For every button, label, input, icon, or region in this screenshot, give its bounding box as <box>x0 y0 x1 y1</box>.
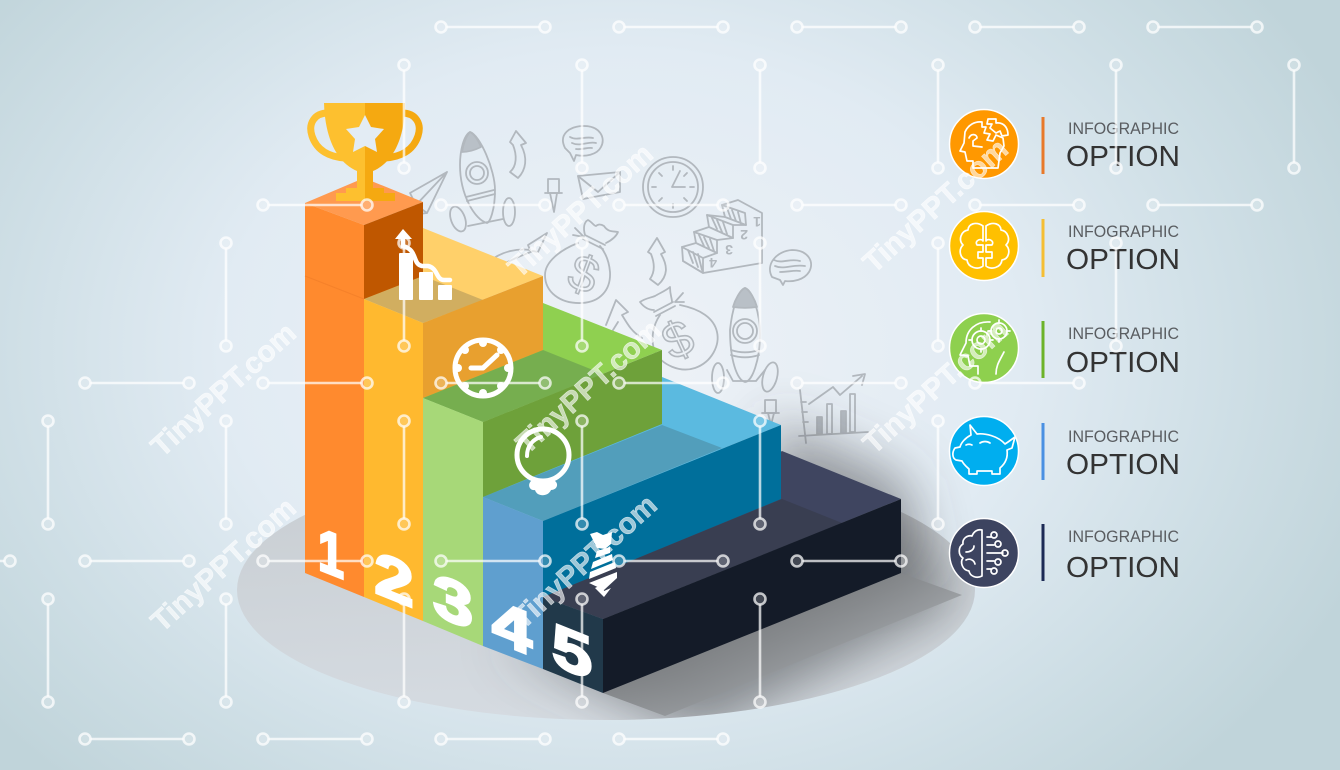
doodle: rocket right <box>712 288 781 393</box>
doodle: clock <box>643 157 703 217</box>
doodle: small arrow <box>606 300 642 338</box>
watermark 6: TinyPPT.com <box>857 132 1015 279</box>
doodle: speech bubble <box>563 126 603 161</box>
icon: clock <box>454 339 512 397</box>
step 4: blue <box>483 377 781 669</box>
doodle: money bag left <box>545 220 618 305</box>
watermarks <box>145 132 1015 638</box>
icon: head with gears <box>960 320 1010 374</box>
doodle: speech bubble right <box>770 250 811 285</box>
step 3: green <box>423 303 662 646</box>
option 5: navy <box>950 518 1180 588</box>
option 1: orange: OPTION <box>1066 141 1180 173</box>
doodle: paper plane <box>410 172 447 214</box>
watermark 5: TinyPPT.com <box>506 488 664 635</box>
doodle: rocket left <box>447 132 515 234</box>
option 4: blue: INFOGRAPHIC <box>1068 428 1179 446</box>
option 1: orange <box>950 110 1180 178</box>
doodle: stairs: 4 <box>709 255 717 271</box>
doodle: envelope <box>578 172 620 199</box>
watermark 7: TinyPPT.com <box>857 313 1015 460</box>
doodle: stairs: 3 <box>725 242 733 258</box>
icon: necktie <box>589 532 617 597</box>
option 3: green: INFOGRAPHIC <box>1068 325 1179 343</box>
option 5: navy: OPTION <box>1066 552 1180 584</box>
doodle: money bag left: $ <box>561 243 606 305</box>
legend <box>950 110 1180 588</box>
doodle sketches <box>410 126 868 443</box>
watermark 4: TinyPPT.com <box>510 313 668 460</box>
number 3: 3 <box>433 559 473 643</box>
doodle: arrow left <box>494 233 547 266</box>
option 5: navy: INFOGRAPHIC <box>1068 528 1179 546</box>
step 5: navy <box>543 451 901 693</box>
watermark 3: TinyPPT.com <box>502 137 660 284</box>
doodle: growth chart <box>799 374 868 443</box>
doodle: pin <box>545 179 562 212</box>
option 3: green: OPTION <box>1066 347 1180 379</box>
option 4: blue: OPTION <box>1066 449 1180 481</box>
staircase <box>305 178 901 693</box>
option 4: blue <box>950 416 1180 486</box>
ground ellipse and shadows <box>237 420 975 735</box>
step 1: orange <box>305 178 423 597</box>
option 3: green <box>950 314 1180 382</box>
option 2: yellow <box>950 212 1180 280</box>
step 2: yellow <box>364 228 543 621</box>
number 4: 4 <box>492 585 532 669</box>
icon: puzzle brain <box>960 223 1009 268</box>
doodle: money bag right <box>640 287 718 371</box>
number 2: 2 <box>374 538 414 621</box>
doodle: curved arrow <box>510 131 526 178</box>
step numbers <box>318 515 592 693</box>
doodle: curved arrow middle <box>648 238 666 285</box>
icon: puzzle head <box>960 119 1008 168</box>
number 5: 5 <box>552 609 592 693</box>
watermark 2: TinyPPT.com <box>145 491 303 638</box>
icon: rising bar chart <box>395 229 452 300</box>
doodle: stairs <box>682 200 762 273</box>
icon: piggy bank <box>953 425 1015 474</box>
option 1: orange: INFOGRAPHIC <box>1068 120 1179 138</box>
doodle: stairs: 1 <box>753 214 761 230</box>
number 1: 1 <box>318 515 344 592</box>
doodle: money bag right: $ <box>653 308 702 371</box>
icon: trophy <box>311 103 419 201</box>
icon: circuit brain <box>959 530 1008 577</box>
option 2: yellow: OPTION <box>1066 244 1180 276</box>
doodle: stairs: 2 <box>740 227 748 243</box>
doodle: pin small <box>762 400 779 425</box>
option 2: yellow: INFOGRAPHIC <box>1068 223 1179 241</box>
icon: light bulb <box>517 429 569 495</box>
watermark 1: TinyPPT.com <box>145 316 303 463</box>
